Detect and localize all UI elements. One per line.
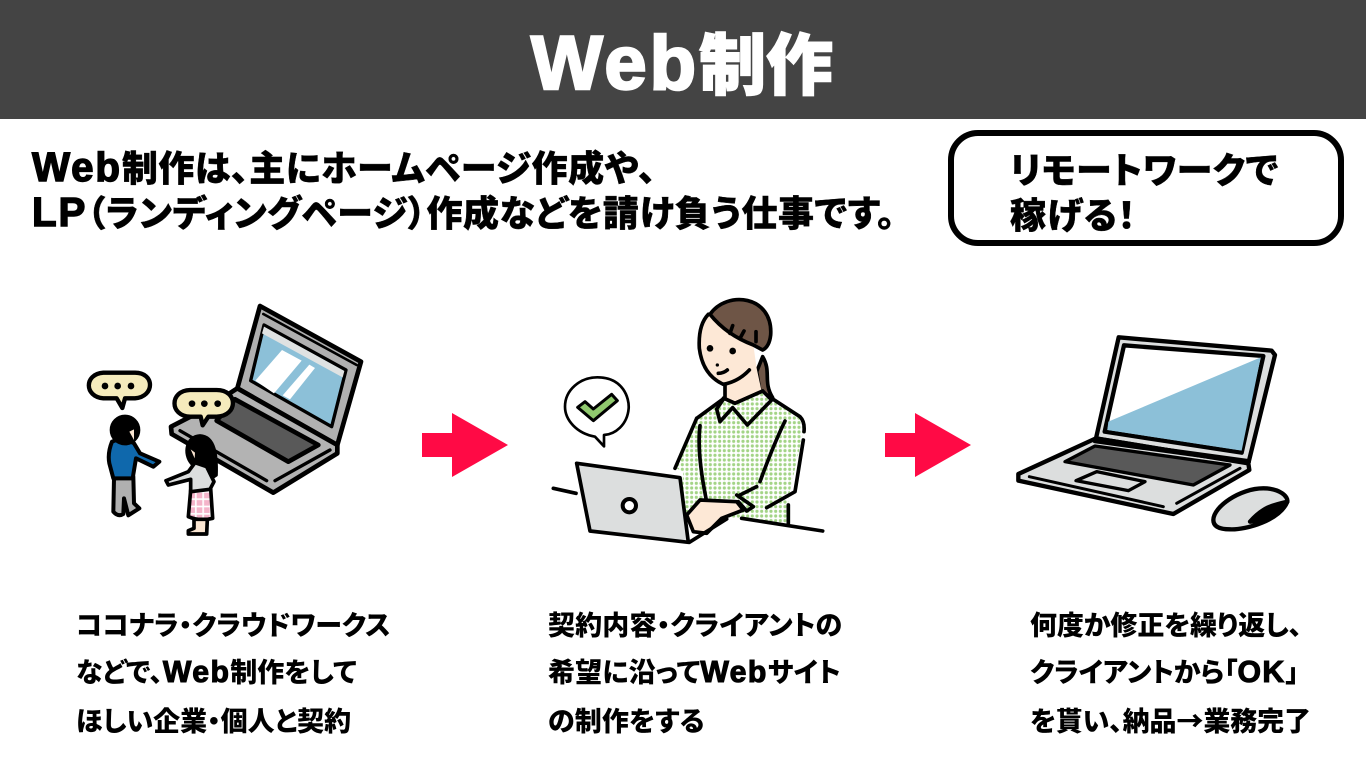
illustration: woman working on laptop [552, 298, 824, 544]
intro text: LP（ランディングページ）作成などを請け負う仕事です。 [32, 185, 895, 237]
woman hair [710, 300, 771, 350]
icon: mouse [1213, 488, 1287, 529]
caption 1: などで、Web制作をして [76, 651, 357, 690]
icon: speech bubble left [89, 373, 150, 408]
icon: check mark [578, 394, 617, 421]
hand [687, 500, 743, 533]
caption 3: を貰い、納品→業務完了 [1030, 700, 1311, 739]
callout text: 稼げる！ [1010, 187, 1136, 239]
collar [717, 391, 772, 425]
person: woman [166, 436, 216, 534]
callout text: リモートワークで [1010, 142, 1279, 194]
callout text [1010, 142, 1279, 239]
caption 1: ほしい企業・個人と契約 [76, 700, 351, 739]
arrow 2 [885, 413, 971, 477]
title: Web制作 [531, 12, 833, 109]
woman face [699, 315, 762, 403]
caption 2 [548, 604, 842, 739]
caption 3: クライアントから「OK」 [1030, 651, 1299, 690]
desk [553, 488, 823, 531]
caption 1 [76, 604, 391, 739]
illustration: laptop and mouse [1016, 335, 1290, 532]
intro text [31, 140, 895, 237]
caption 2: 希望に沿ってWebサイト [548, 651, 841, 690]
callout: remote work [948, 130, 1344, 246]
woman hair tail [757, 357, 773, 398]
caption 2: の制作をする [548, 700, 705, 739]
illustration: clients and large laptop [86, 304, 364, 536]
intro text: Web制作は、主にホームページ作成や、 [32, 140, 656, 192]
woman shirt [677, 398, 803, 523]
caption 1: ココナラ・クラウドワークス [76, 604, 391, 643]
caption 2: 契約内容・クライアントの [548, 604, 842, 643]
caption 3: 何度か修正を繰り返し、 [1030, 604, 1302, 643]
caption 3 [1030, 604, 1311, 739]
check bubble [565, 377, 629, 446]
icon: speech bubble right [174, 390, 233, 425]
arrow 1 [422, 413, 508, 477]
title banner [0, 0, 1366, 119]
laptop [577, 463, 688, 542]
person: man [109, 417, 159, 515]
